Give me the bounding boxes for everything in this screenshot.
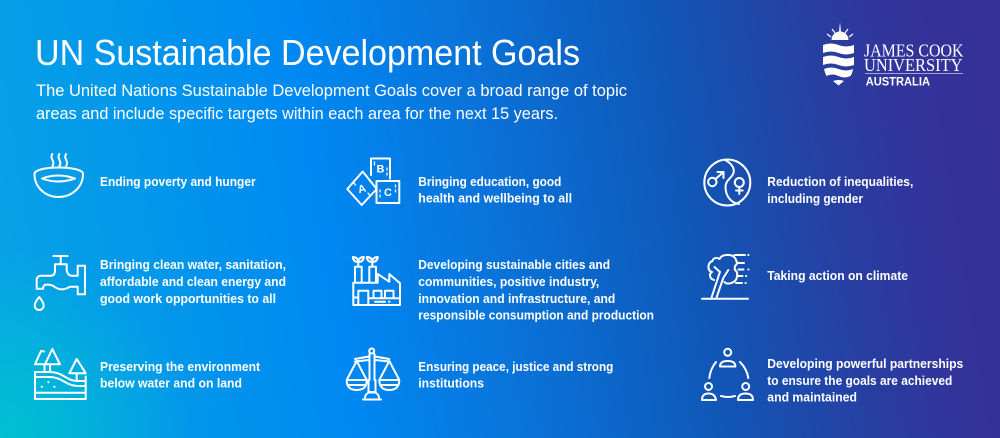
- icon: gender symbols in yin-yang circle: [704, 160, 750, 206]
- label: institutions: [418, 376, 484, 391]
- label: Developing powerful partnerships: [767, 356, 963, 371]
- label: below water and on land: [100, 376, 242, 391]
- label: including gender: [767, 191, 863, 206]
- logo wordmark: UNIVERSITY: [864, 55, 962, 75]
- logo wordmark: AUSTRALIA: [866, 76, 930, 88]
- intro paragraph: The United Nations Sustainable Development Goals cover a broad range of topic: [36, 81, 627, 100]
- icon: alphabet blocks: [347, 158, 399, 205]
- label: Developing sustainable cities and: [418, 257, 610, 272]
- label: Bringing clean water, sanitation,: [100, 257, 286, 272]
- label: [418, 359, 613, 391]
- item: water, energy and work: [35, 256, 286, 310]
- label: [100, 257, 286, 306]
- label: [767, 356, 963, 404]
- logo: James Cook University Australia: [823, 22, 964, 88]
- item: peace and justice: [347, 348, 613, 400]
- label: and maintained: [767, 390, 857, 404]
- item: partnerships: [702, 349, 963, 404]
- label: Ending poverty and hunger: [100, 174, 256, 189]
- label: [418, 174, 572, 206]
- icon: alphabet blocks: B: [377, 164, 385, 176]
- icon: steaming bowl: [34, 154, 83, 197]
- label: affordable and clean energy and: [100, 274, 286, 289]
- icon: tap with drop: [35, 256, 85, 310]
- icon: alphabet blocks: C: [384, 187, 392, 199]
- item: inequalities: [704, 160, 913, 206]
- intro paragraph: [36, 81, 627, 123]
- icon: alphabet blocks: A: [357, 183, 368, 196]
- item: climate: [702, 255, 908, 299]
- label: good work opportunities to all: [100, 291, 276, 306]
- title: UN Sustainable Development Goals: [35, 32, 580, 73]
- label: [100, 359, 261, 391]
- logo shield: [823, 22, 854, 86]
- label: Reduction of inequalities,: [767, 174, 913, 189]
- logo wordmark: JAMES COOK: [864, 40, 964, 60]
- icon: green factory: [353, 257, 400, 305]
- item: education and health: [347, 158, 572, 206]
- item: poverty and hunger: [34, 154, 256, 197]
- icon: balance scales: [347, 348, 399, 400]
- icon: tree in wind: [702, 255, 748, 299]
- label: communities, positive industry,: [418, 274, 599, 289]
- item: cities and industry: [353, 257, 654, 322]
- label: health and wellbeing to all: [418, 190, 572, 206]
- label: Taking action on climate: [767, 268, 908, 283]
- label: Preserving the environment: [100, 359, 261, 374]
- label: Bringing education, good: [418, 174, 561, 189]
- label: innovation and infrastructure, and: [418, 291, 615, 306]
- label: Ensuring peace, justice and strong: [418, 359, 613, 374]
- label: to ensure the goals are achieved: [767, 373, 952, 388]
- logo wordmark: [864, 40, 964, 88]
- label: [767, 174, 913, 206]
- icon: trees and land: [35, 349, 86, 399]
- item: environment: [35, 349, 261, 399]
- intro paragraph: areas and include specific targets within each area for the next 15 years.: [36, 104, 558, 123]
- label: [418, 257, 654, 322]
- icon: three connected people: [702, 349, 753, 400]
- label: responsible consumption and production: [418, 308, 654, 322]
